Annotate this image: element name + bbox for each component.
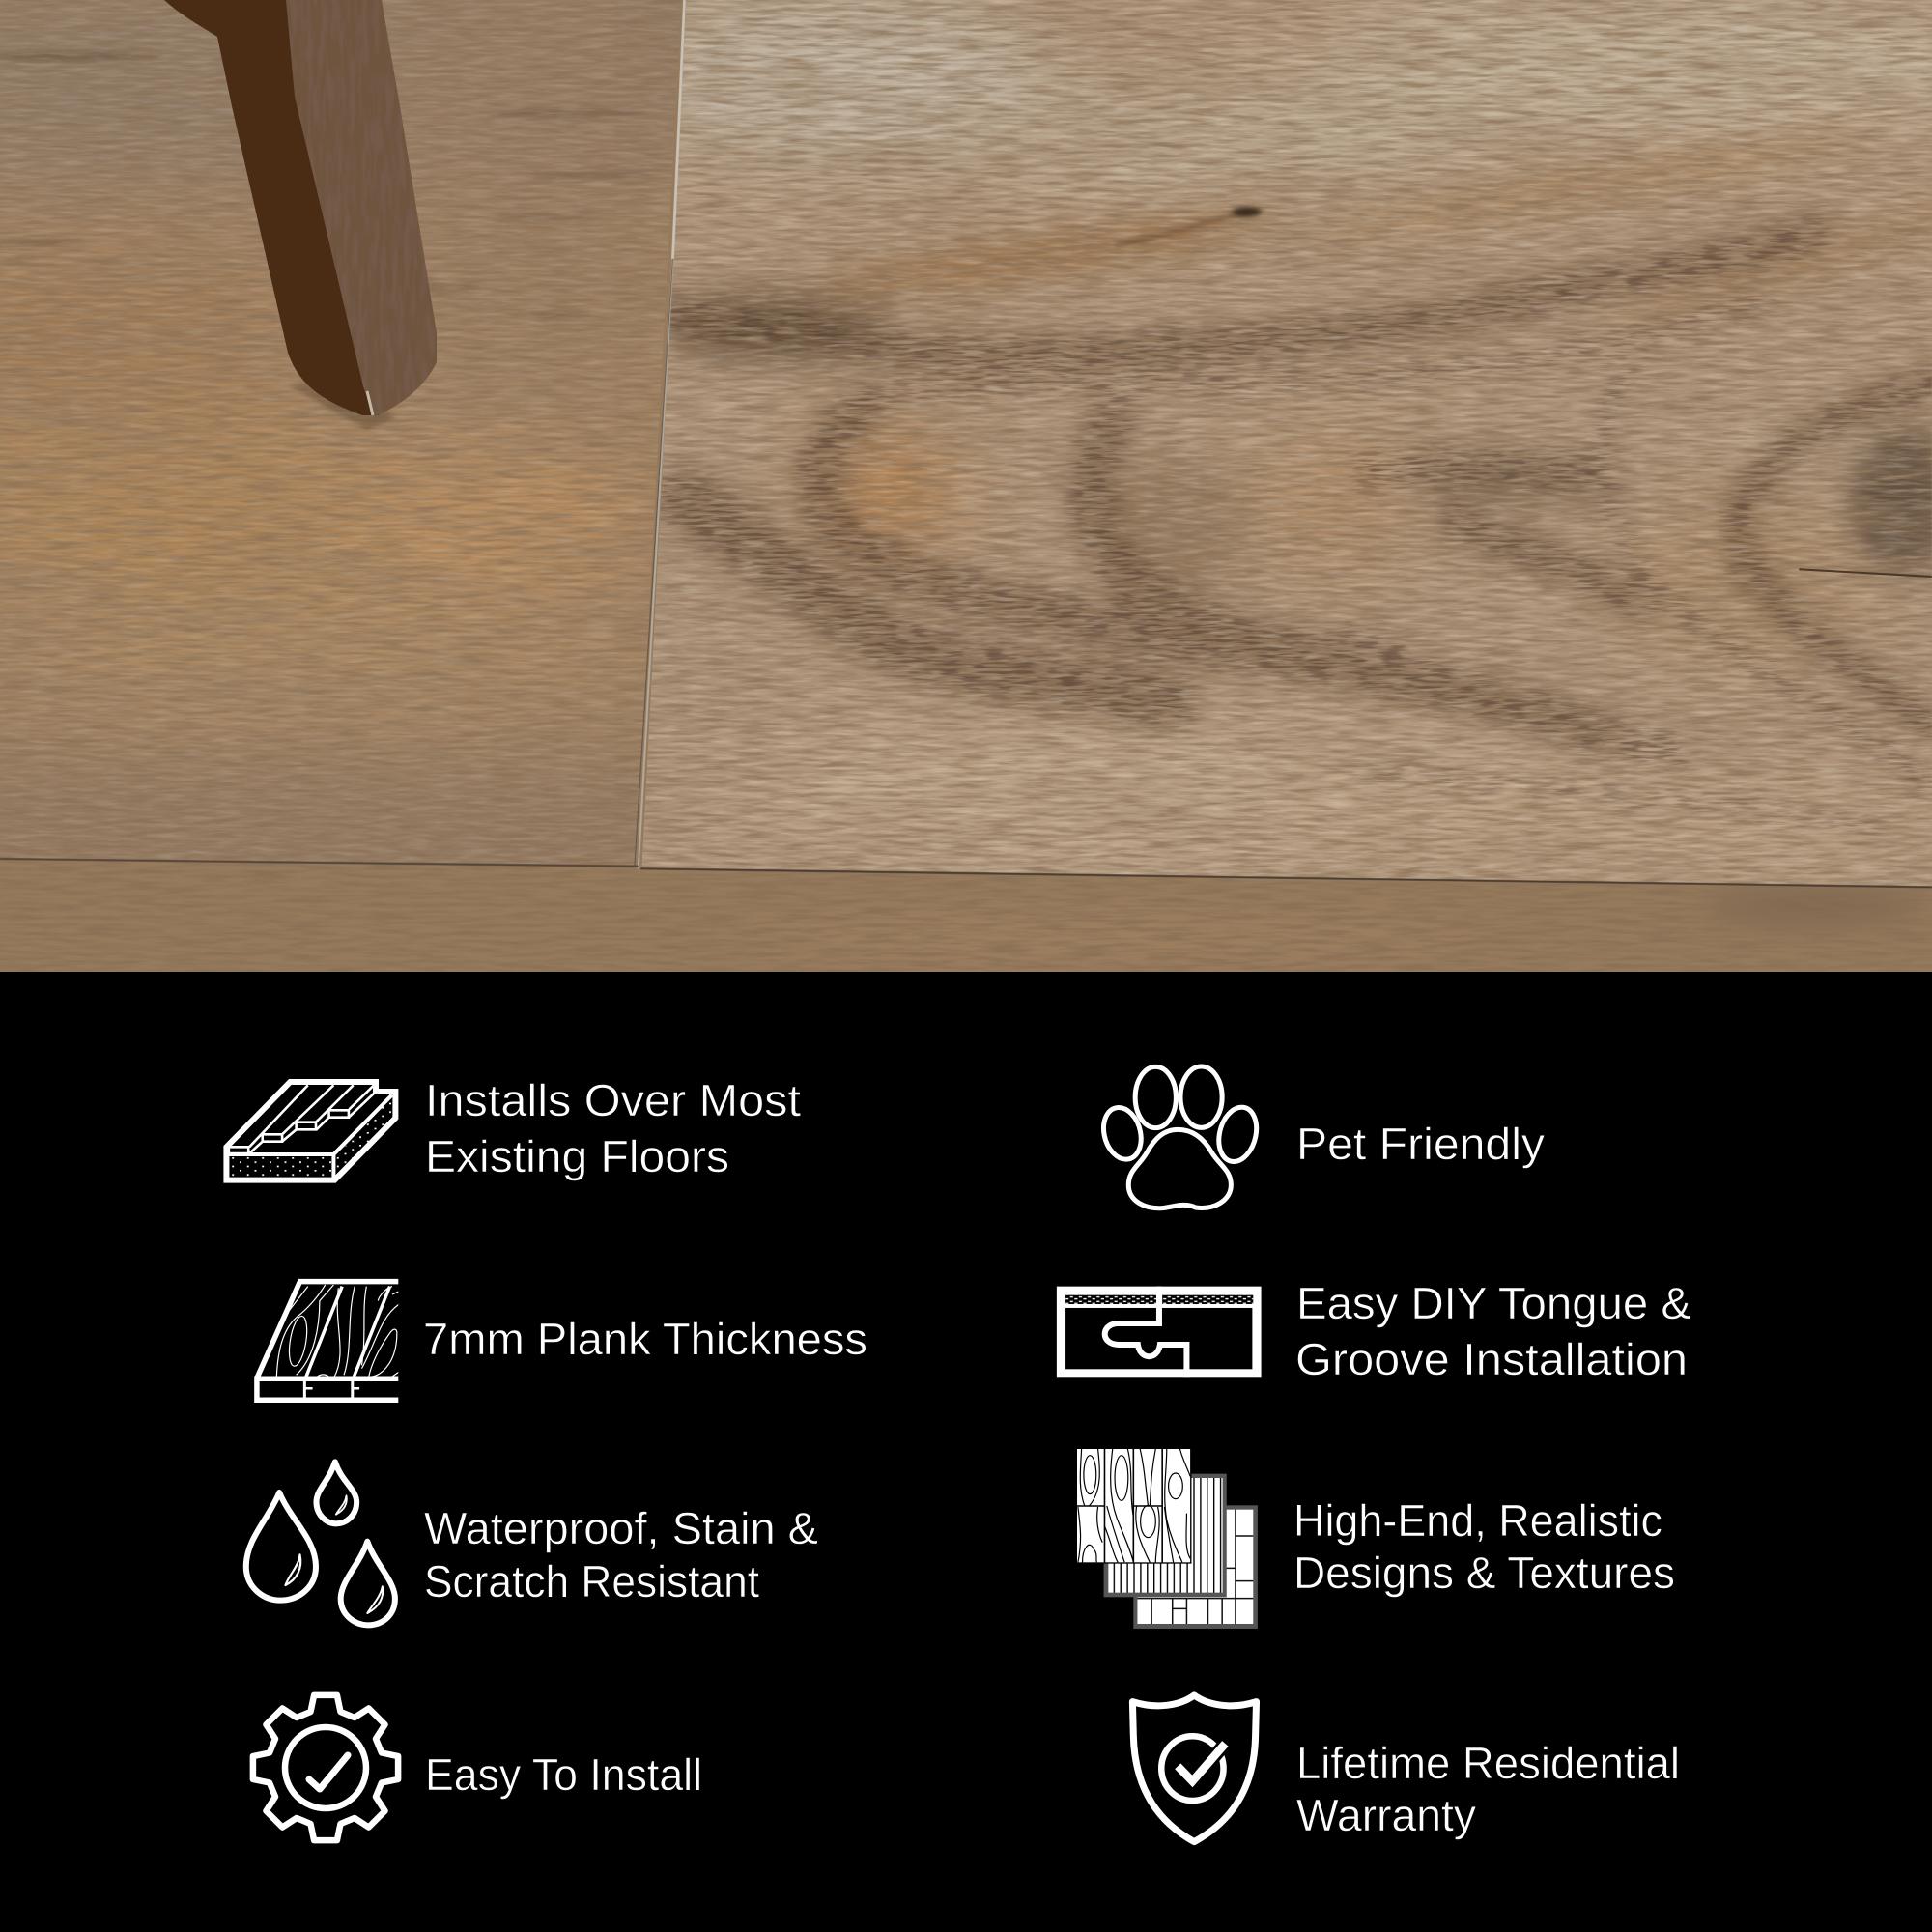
sample: wood grain: [1076, 1449, 1191, 1564]
label text: [424, 1503, 818, 1606]
label text: Waterproof, Stain &: [424, 1503, 818, 1553]
icon: stacked floor samples: [1076, 1449, 1258, 1629]
bottom plank: [0, 860, 1932, 972]
icon: layered floor block: [226, 1082, 395, 1180]
label text: 7mm Plank Thickness: [423, 1314, 867, 1364]
label text: Easy DIY Tongue &: [1296, 1278, 1691, 1328]
icon: chair leg: [164, 0, 437, 430]
icon: shield with check mark: [1132, 1695, 1257, 1842]
label text: Designs & Textures: [1293, 1548, 1675, 1598]
feature: high-end realistic designs and textures: [1076, 1449, 1675, 1629]
photo: wood plank floor with chair leg: [0, 0, 1932, 985]
label text: Easy To Install: [425, 1749, 702, 1800]
icon: tongue and groove profile: [1057, 1287, 1262, 1377]
sample: brick pattern: [1133, 1505, 1258, 1629]
icon: three water drops: [246, 1462, 395, 1625]
feature: easy diy tongue and groove installation: [1057, 1278, 1691, 1384]
sample: straight grain: [1104, 1474, 1227, 1597]
label text: High-End, Realistic: [1293, 1495, 1662, 1546]
label text: [425, 1075, 801, 1181]
label text: Existing Floors: [425, 1131, 729, 1181]
label text: [1293, 1495, 1675, 1598]
feature: waterproof, stain and scratch resistant: [246, 1462, 818, 1625]
feature: installs over most existing floors: [226, 1075, 801, 1181]
label text: Groove Installation: [1295, 1334, 1688, 1384]
label text: Warranty: [1296, 1790, 1476, 1840]
label text: [1295, 1278, 1691, 1384]
feature: lifetime residential warranty: [1132, 1695, 1680, 1842]
label text: [1296, 1738, 1680, 1840]
icon: wood plank with grain: [257, 1282, 412, 1400]
feature: 7mm plank thickness: [257, 1282, 867, 1400]
left plank: [0, 0, 681, 865]
label text: Lifetime Residential: [1296, 1738, 1680, 1788]
label text: Scratch Resistant: [424, 1556, 759, 1606]
label text: Installs Over Most: [425, 1075, 801, 1125]
soft wood figure shading: [678, 234, 1932, 733]
icon: gear with check mark: [253, 1695, 398, 1840]
feature: pet friendly: [1099, 1066, 1545, 1208]
right plank: [616, 0, 1932, 899]
icon: paw print: [1099, 1066, 1261, 1208]
plank seams: [0, 0, 1932, 887]
label text: Pet Friendly: [1296, 1119, 1545, 1169]
stippled wood figure bands: [678, 234, 1932, 826]
feature: easy to install: [253, 1695, 702, 1840]
